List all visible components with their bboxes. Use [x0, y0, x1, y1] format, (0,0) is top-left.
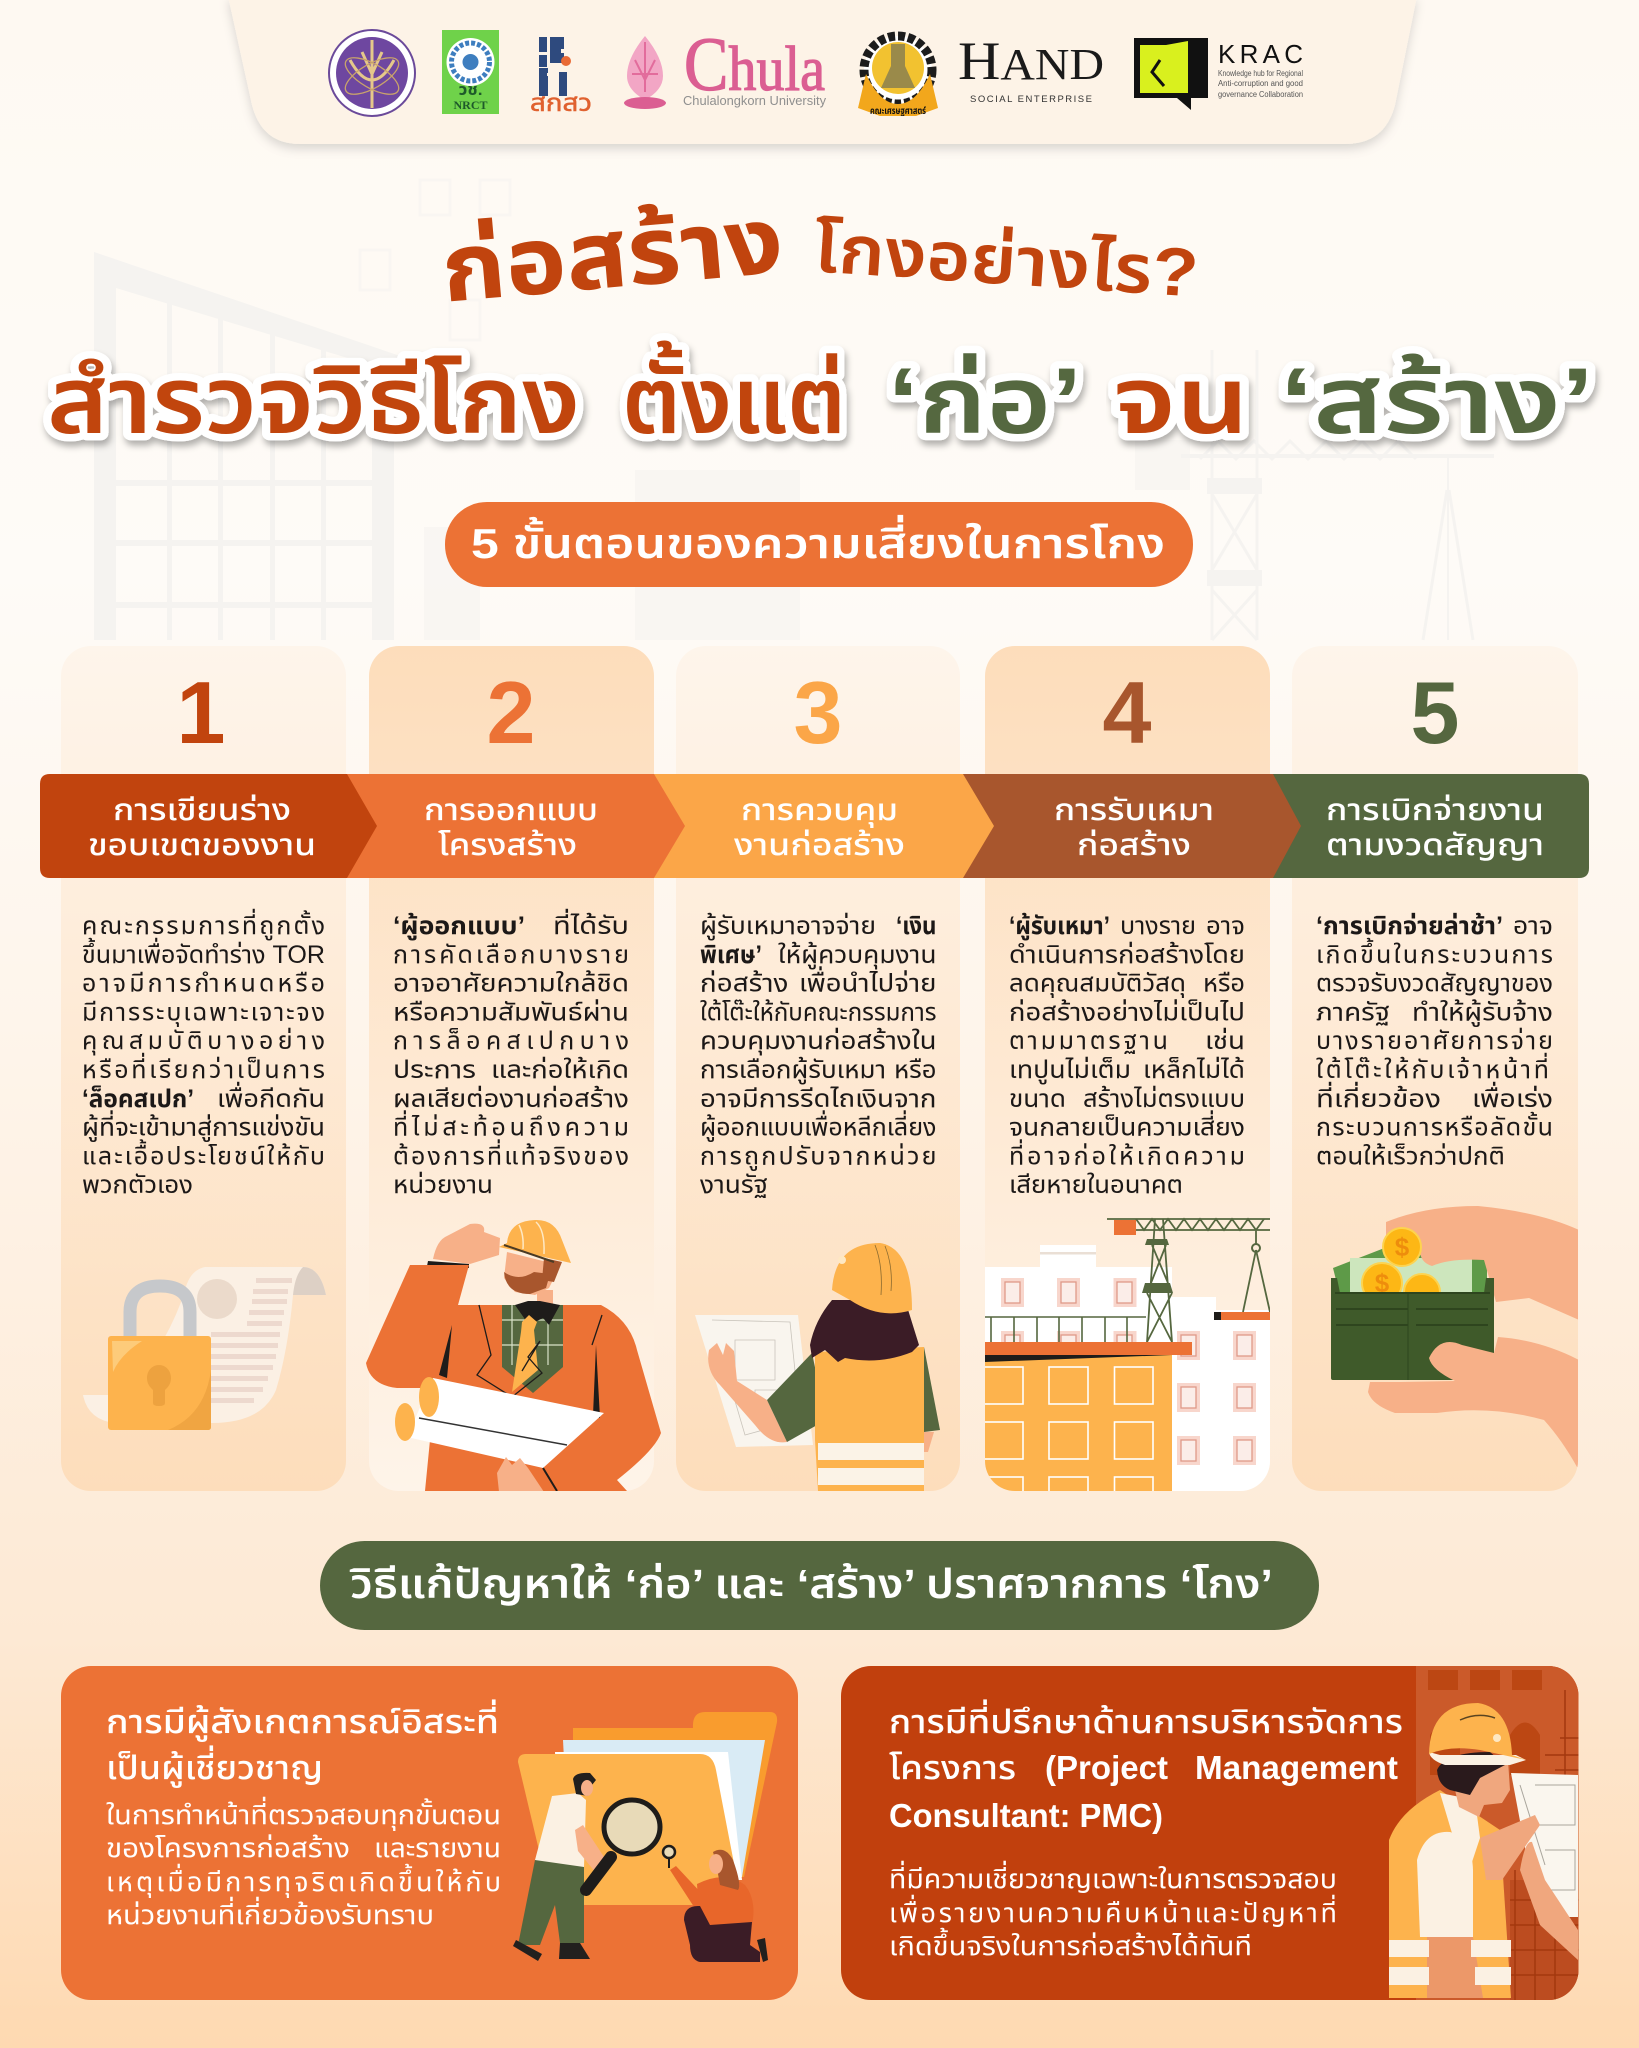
text block: step 2: การคัดเลือกบางราย [393, 941, 629, 969]
logo: TSRI [530, 37, 592, 117]
text block: step 3: ให้ผู้ควบคุมงาน [778, 941, 936, 970]
ribbon label 4: การรับเหมา [1054, 794, 1214, 827]
inspector with large magnifier [513, 1773, 660, 1961]
ribbon label 4 [1054, 794, 1214, 862]
crane [1107, 1219, 1271, 1342]
step numbers [177, 663, 1459, 762]
panel: project management consultant [841, 1666, 1581, 2000]
text block: step 4: เช่น [1205, 1027, 1245, 1055]
logo: gear emblem: คณะเศรษฐศาสตร์ [870, 106, 926, 117]
step numbers: 5 [1411, 663, 1459, 762]
text block: step 3: ควบคุมงานก่อสร้างใน [700, 1027, 936, 1056]
text block: step 2: ที่ได้รับ [553, 908, 629, 940]
ribbon label 2: การออกแบบ [424, 794, 598, 827]
step numbers: 2 [487, 663, 535, 762]
ribbon label 3: งานก่อสร้าง [734, 829, 905, 862]
panel heading: เป็นผู้เชี่ยวชาญ [106, 1745, 323, 1788]
text block: step 5: เพื่อเร่ง [1472, 1081, 1553, 1113]
ribbon label 2: โครงสร้าง [438, 829, 577, 862]
illustration: padlock and document scroll [83, 1267, 326, 1430]
text block: step 4: สร้างไม่ตรงแบบ [1083, 1085, 1245, 1113]
text block: step 4: ดำเนินการก่อสร้างโดย [1009, 941, 1245, 969]
text block: step 4 [1009, 912, 1245, 1199]
panel body text [106, 1796, 501, 1930]
heading pill: 5 steps: 5 ขั้นตอนของความเสี่ยงในการโกง [471, 514, 1165, 567]
step numbers: 4 [1103, 663, 1152, 762]
logo: KRAC: Anti-corruption and good [1218, 79, 1303, 88]
text block: step 1: มีการระบุเฉพาะเจาะจง [82, 998, 325, 1027]
text block: step 4: หรือ [1203, 970, 1245, 998]
text block: step 2: หรือความสัมพันธ์ผ่าน [393, 998, 629, 1026]
logo: KRAC: KRAC [1218, 39, 1303, 69]
ribbon label 4: ก่อสร้าง [1077, 829, 1191, 862]
logo: Chula: Chula [684, 23, 825, 107]
step numbers: 3 [794, 663, 842, 762]
text block: step 3 [700, 912, 936, 1199]
panel heading: การมีที่ปรึกษาด้านการบริหารจัดการ [889, 1699, 1403, 1740]
logo: HAND Social Enterprise: HAND [958, 31, 1104, 91]
logo: gear emblem [858, 36, 938, 117]
inspector kneeling [663, 1846, 768, 1962]
text block: step 4: ลดคุณสมบัติวัสดุ [1009, 970, 1186, 999]
logo: NRCT: NRCT [453, 98, 488, 112]
panel body text: ที่มีความเชี่ยวชาญเฉพาะในการตรวจสอบ [889, 1860, 1337, 1894]
text block: step 1: คุณสมบัติบางอย่าง [82, 1027, 325, 1056]
panel body text [889, 1860, 1337, 1961]
text block: step 5: เกิดขึ้นในกระบวนการ [1316, 937, 1553, 969]
text block: step 5: กระบวนการหรือลัดขั้น [1316, 1111, 1553, 1142]
logo: KRAC: governance Collaboration [1218, 90, 1303, 99]
panel heading: Management [1195, 1749, 1398, 1786]
text block: step 1: หรือที่เรียกว่าเป็นการ [82, 1052, 325, 1084]
panel heading [889, 1699, 1403, 1834]
panel body text: เพื่อรายงานความคืบหน้าและปัญหาที่ [889, 1894, 1337, 1928]
text block: step 2: การล็อคสเปกบาง [393, 1027, 629, 1055]
logo: KRAC [1134, 38, 1303, 110]
text block: step 2 [393, 908, 629, 1199]
text block: step 3: อาจมีการรีดไถเงินจาก [700, 1085, 936, 1113]
text block: step 1: ขึ้นมาเพื่อจัดทำร่าง TOR [82, 937, 325, 969]
panel: independent expert observers [61, 1666, 798, 2000]
illustration: worker reading plan [695, 1243, 940, 1491]
panel body text: และรายงาน [374, 1833, 501, 1863]
text block: step 2: ประการ [393, 1056, 476, 1084]
text block: step 3: ผู้ออกแบบเพื่อหลีกเลี่ยง [700, 1110, 936, 1143]
heading pill: solutions: วิธีแก้ปัญหาให้ ‘ก่อ’ และ ‘สร้าง’ ปราศจากการ ‘โกง’ [349, 1561, 1273, 1607]
panel heading [106, 1699, 499, 1788]
text block: step 3: การถูกปรับจากหน่วย [700, 1142, 936, 1171]
ribbon label 1 [88, 794, 316, 862]
panel body text: ของโครงการก่อสร้าง [106, 1833, 350, 1863]
illustration: architect with blueprints [366, 1220, 661, 1501]
text block: step 5: ที่เกี่ยวข้อง [1316, 1081, 1441, 1113]
panel body text: ในการทำหน้าที่ตรวจสอบทุกขั้นตอน [106, 1796, 501, 1831]
text block: step 5: อาจ [1513, 912, 1553, 940]
text block: step 2: ที่ไม่สะท้อนถึงความ [393, 1110, 629, 1142]
illustration: folder and inspectors [513, 1712, 777, 1962]
text block: step 4: เสียหายในอนาคต [1009, 1171, 1183, 1199]
text block: step 2: ‘ผู้ออกแบบ’ [393, 912, 525, 941]
title: main headline: ตั้งแต่ [622, 340, 846, 453]
title: main headline: ‘สร้าง’ [1280, 348, 1594, 453]
text block: step 1: และเอื้อประโยชน์ให้กับ [82, 1138, 325, 1170]
pink windows [1001, 1278, 1256, 1465]
title: arched line: ก่อสร้าง [437, 187, 787, 322]
title: main headline: ‘ก่อ’ [888, 348, 1082, 453]
ribbon label 2 [424, 794, 598, 862]
text block: step 3: งานรัฐ [700, 1171, 768, 1199]
text block: step 5: ใต้โต๊ะให้กับเจ้าหน้าที่ [1316, 1052, 1549, 1084]
text block: step 3: ‘เงิน [896, 912, 936, 940]
title: main headline: จน [1113, 348, 1249, 453]
panel body text: หน่วยงานที่เกี่ยวข้องรับทราบ [106, 1896, 434, 1930]
heading pill: 5 steps [445, 502, 1193, 587]
text block: step 5: ภาครัฐ [1316, 998, 1390, 1026]
text block: step 1: พวกตัวเอง [82, 1171, 193, 1199]
logo: purple atom seal [329, 30, 415, 116]
text block: step 5: ‘การเบิกจ่ายล่าช้า’ [1316, 912, 1503, 940]
ribbon: five chevrons [40, 774, 1589, 878]
illustration: wallet and hands: $ [1395, 1232, 1410, 1262]
text block: step 4: อาจ [1206, 912, 1245, 940]
text block: step 1: เพื่อกีดกัน [217, 1081, 325, 1113]
illustration: wallet and hands: $ [1375, 1268, 1390, 1298]
ribbon label 5 [1326, 794, 1544, 862]
text block: step 5: ทำให้ผู้รับจ้าง [1412, 998, 1553, 1027]
text block: step 3: หรือ [894, 1056, 936, 1084]
background: ghost construction scene [94, 180, 1494, 640]
text block: step 3: ใต้โต๊ะให้กับคณะกรรมการ [700, 998, 936, 1026]
text block: step 5: ตอนให้เร็วกว่าปกติ [1316, 1142, 1505, 1170]
text block: step 4: ที่อาจก่อให้เกิดความ [1009, 1138, 1245, 1170]
text block: step 1: อาจมีการกำหนดหรือ [82, 970, 325, 998]
logo: TSRI: สกสว [530, 90, 592, 117]
panel body text: เกิดขึ้นจริงในการก่อสร้างได้ทันที [889, 1927, 1252, 1961]
text block: step 2: ผลเสียต่องานก่อสร้าง [393, 1085, 629, 1113]
logo: Chula [624, 23, 826, 109]
text block: step 4: ขนาด [1009, 1085, 1066, 1113]
title: arched line: โกงอย่างไร? [811, 210, 1201, 312]
text block: step 4: เทปูนไม่เต็ม [1009, 1056, 1131, 1085]
title: main headline: สำรวจวิธีโกง [47, 348, 580, 453]
illustration: consultant with plan [1389, 1666, 1581, 2000]
text block: step 1: ผู้ที่จะเข้ามาสู่การแข่งขัน [82, 1110, 325, 1143]
text block: step 4: บางราย [1120, 912, 1196, 940]
ribbon label 3: การควบคุม [741, 794, 898, 828]
illustration: building and crane [985, 1218, 1270, 1491]
text block: step 3: การเลือกผู้รับเหมา [700, 1056, 886, 1085]
header logo tab [228, 0, 1417, 144]
illustration: wallet and hands [1331, 1206, 1579, 1467]
text block: step 3: ผู้รับเหมาอาจจ่าย [700, 912, 876, 941]
text block: step 4: จนกลายเป็นความเสี่ยง [1009, 1110, 1245, 1142]
panel heading: (Project [1045, 1749, 1168, 1786]
text block: step 4: ตามมาตรฐาน [1009, 1027, 1168, 1055]
text block: step 4: ‘ผู้รับเหมา’ [1009, 912, 1110, 941]
panel body text: เหตุเมื่อมีการทุจริตเกิดขึ้นให้กับ [106, 1863, 501, 1898]
logo: NRCT: วช. [458, 82, 482, 99]
logo: NRCT [442, 30, 499, 114]
ribbon label 5: การเบิกจ่ายงาน [1326, 794, 1544, 827]
text block: step 5: ตรวจรับงวดสัญญาของ [1316, 970, 1553, 998]
heading pill: solutions [320, 1541, 1319, 1630]
panel heading: โครงการ [889, 1749, 1016, 1786]
orange block windows [985, 1366, 1154, 1491]
text block: step 1: ‘ล็อคสเปก’ [82, 1085, 194, 1113]
text block: step 2: หน่วยงาน [393, 1171, 493, 1199]
ribbon label 1: การเขียนร่าง [113, 794, 291, 827]
text block: step 4: ก่อสร้างอย่างไม่เป็นไป [1009, 998, 1245, 1026]
logo: Chula: Chulalongkorn University [683, 93, 826, 108]
ribbon label 1: ขอบเขตของงาน [88, 829, 316, 862]
text block: step 3: พิเศษ’ [700, 941, 762, 969]
text block: step 4: เหล็กไม่ได้ [1143, 1056, 1245, 1084]
text block: step 2: อาจอาศัยความใกล้ชิด [393, 970, 629, 998]
text block: step 3: ก่อสร้าง [700, 970, 788, 998]
ribbon label 3 [734, 794, 905, 862]
ribbon label 5: ตามงวดสัญญา [1326, 829, 1544, 862]
logo: KRAC: Knowledge hub for Regional [1218, 69, 1303, 78]
column backgrounds [61, 646, 1578, 1491]
text block: step 5 [1316, 912, 1553, 1170]
panel heading: การมีผู้สังเกตการณ์อิสระที่ [106, 1699, 499, 1742]
text block: step 2: และก่อให้เกิด [491, 1056, 629, 1084]
panel heading: Consultant: PMC) [889, 1797, 1163, 1834]
title: arched line [437, 187, 1201, 322]
text block: step 3: เพื่อนำไปจ่าย [799, 966, 936, 998]
text block: step 2: ต้องการที่แท้จริงของ [393, 1138, 629, 1170]
step numbers: 1 [177, 663, 225, 762]
text block: step 1: คณะกรรมการที่ถูกตั้ง [82, 908, 325, 941]
logo: HAND Social Enterprise: SOCIAL ENTERPRISE [970, 94, 1092, 105]
text block: step 5: บางรายอาศัยการจ่าย [1316, 1027, 1553, 1055]
title: main headline [47, 340, 1594, 453]
text block: step 1 [82, 908, 325, 1199]
